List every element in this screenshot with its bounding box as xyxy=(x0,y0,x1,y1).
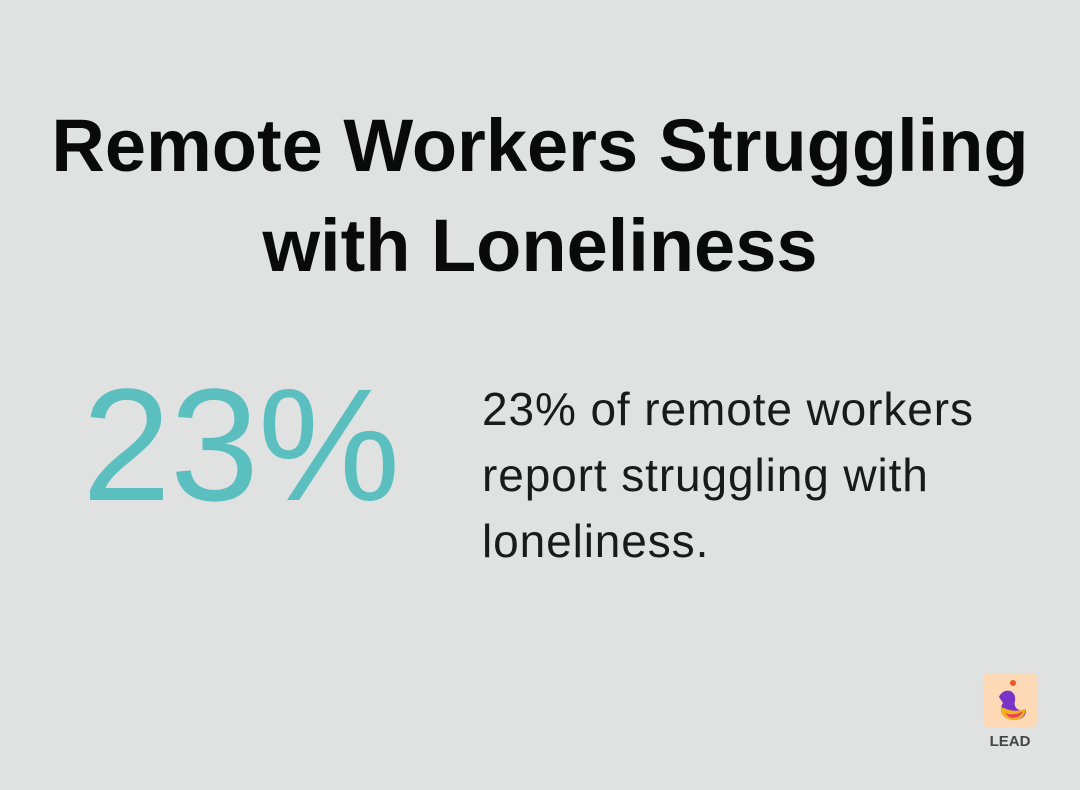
logo: LEAD xyxy=(983,673,1037,750)
logo: LEAD: LEAD xyxy=(990,733,1031,750)
big statistic: 23% xyxy=(82,355,399,534)
description text xyxy=(482,383,974,567)
title xyxy=(51,104,1029,287)
title: Remote Workers Struggling xyxy=(51,104,1029,187)
title: with Loneliness xyxy=(262,204,818,287)
description text: loneliness. xyxy=(482,515,709,567)
description text: 23% of remote workers xyxy=(482,383,974,435)
description text: report struggling with xyxy=(482,449,929,501)
